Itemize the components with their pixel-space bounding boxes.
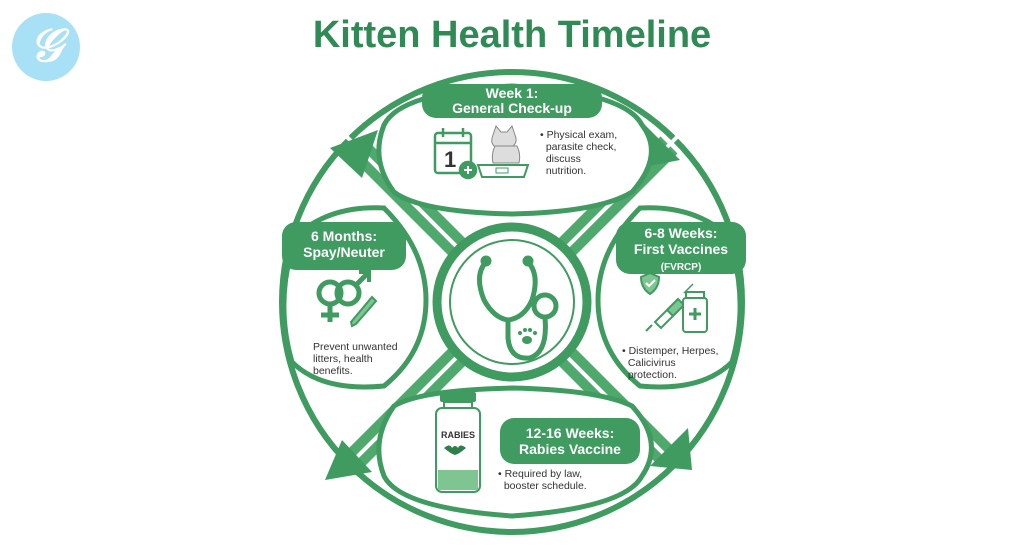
icon: stethoscope [479,258,556,358]
text: 6-8 weeks [622,345,718,381]
icon: rabies vial [436,392,480,492]
text: 12-16 weeks: booster schedule. [504,480,587,492]
icon: calendar [435,128,476,178]
heading: 6-8 weeks [634,225,728,273]
heading: 6 months [303,228,385,260]
heading: 6-8 weeks: First Vaccines [634,241,728,257]
icon: kitten on scale [478,126,528,177]
heading: week 1: General Check-up [452,100,572,116]
icon: shield, syringe and vial [641,273,707,332]
text: week 1: discuss [546,153,581,165]
icon: paw print [518,328,537,344]
heading: 6-8 weeks: 6-8 Weeks: [645,225,717,241]
text: 6-8 weeks: protection. [628,369,677,381]
text: 6 months: benefits. [313,365,353,377]
text: 6-8 weeks: • Distemper, Herpes, [622,345,718,357]
panel outlines [284,86,740,516]
heading: 12-16 weeks [519,425,621,457]
text: week 1 [540,129,617,177]
icon: calendar: 1 [444,147,456,172]
text: 6-8 weeks: Calicivirus [628,357,676,369]
icon: gender symbols [319,272,376,326]
heading: week 1 [452,85,572,116]
outer ring [282,72,742,532]
center circle [437,227,587,377]
text: 6 months: Prevent unwanted [313,341,398,353]
title: Kitten Health Timeline [313,14,711,56]
pills [282,84,746,464]
heading: 6 months: 6 Months: [311,228,377,244]
heading: 6 months: Spay/Neuter [303,244,385,260]
heading: week 1: Week 1: [486,85,538,101]
arrows [325,122,692,480]
diagonal bands [355,145,669,459]
text: 12-16 weeks [498,468,587,492]
text: 6 months [313,341,398,377]
text: week 1: parasite check, [546,141,616,153]
heading: 12-16 weeks: Rabies Vaccine [519,441,621,457]
text: 12-16 weeks: • Required by law, [498,468,582,480]
text: 6 months: litters, health [313,353,373,365]
text: week 1: • Physical exam, [540,129,617,141]
heading: 12-16 weeks: 12-16 Weeks: [526,425,614,441]
icon: rabies vial: RABIES [441,430,475,440]
text: week 1: nutrition. [546,165,586,177]
logo: 𝒢 [30,20,62,71]
logo [12,13,80,81]
heading: 6-8 weeks: (FVRCP) [661,262,701,273]
